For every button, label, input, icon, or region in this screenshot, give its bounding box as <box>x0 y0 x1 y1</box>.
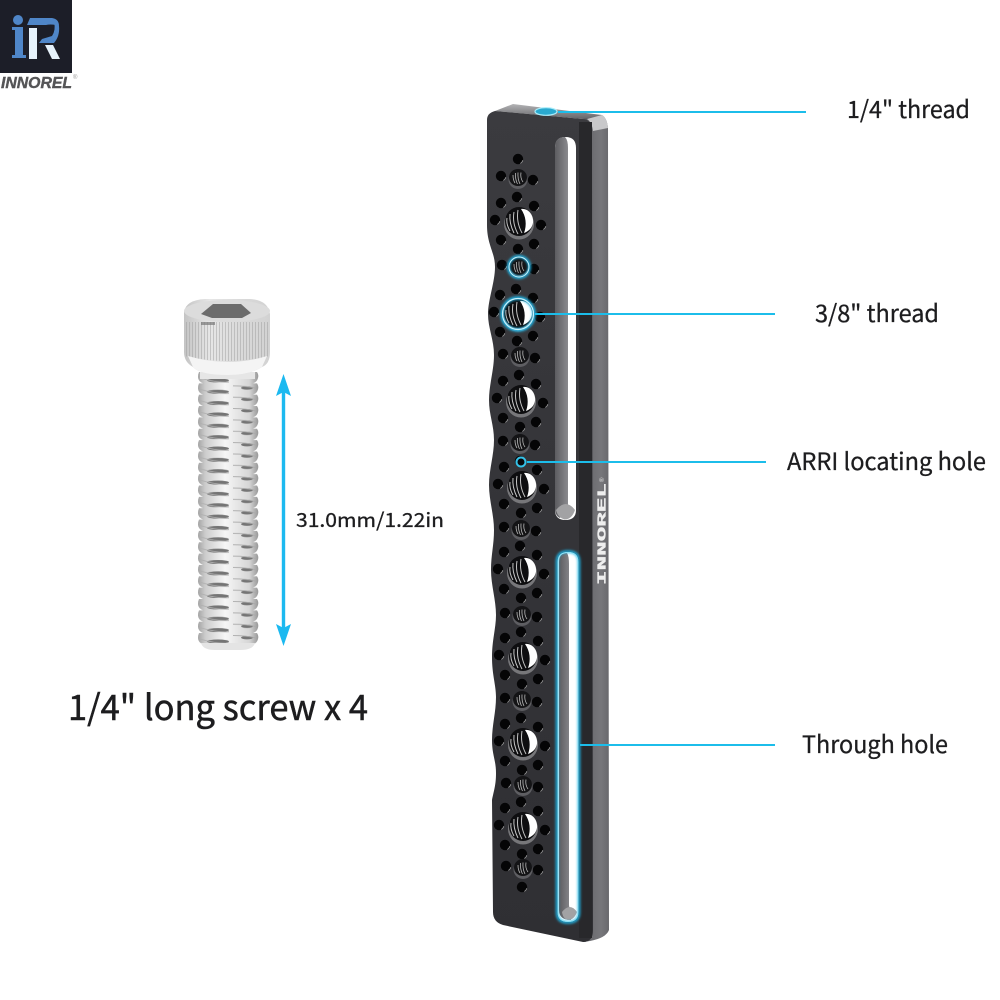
slot opening <box>558 552 578 922</box>
head bottom highlight <box>188 356 267 375</box>
logo wordmark: INNOREL <box>1 75 72 92</box>
label: ARRI locating hole <box>787 442 986 477</box>
glow around through slot <box>557 552 579 922</box>
leader line <box>580 744 775 746</box>
large thread hole 6 <box>494 627 550 689</box>
slot bottom curve <box>562 907 577 920</box>
registered mark: ® <box>73 74 78 81</box>
label: 3/8" thread <box>815 294 939 329</box>
screw head top face <box>184 300 270 322</box>
screw head <box>184 299 270 375</box>
callout: small hole ring <box>508 256 530 278</box>
screw caption: 1/4" long screw x 4 <box>68 680 368 731</box>
dimension arrow <box>276 374 291 646</box>
screw neck highlight <box>200 372 255 379</box>
slot opening <box>555 137 576 520</box>
leader line <box>535 313 775 315</box>
small hole group 5 <box>499 520 541 540</box>
through slot outline <box>558 552 578 922</box>
screw tip <box>201 643 255 650</box>
small hole group 6 <box>500 606 542 626</box>
callout: 3/8 thread <box>502 294 939 330</box>
screw <box>184 299 270 650</box>
leader line <box>558 111 806 113</box>
slot wall <box>559 553 571 920</box>
highlight ring <box>535 108 557 115</box>
dark strip beside slots <box>579 122 592 938</box>
callout: 1/4 thread <box>535 90 970 125</box>
highlight ring <box>502 298 534 330</box>
small hole group 8 <box>501 776 543 796</box>
large thread hole 2 <box>489 284 545 346</box>
large thread hole 4 <box>493 456 549 518</box>
large thread hole 3 <box>492 370 548 432</box>
plate registered mark: ® <box>599 477 606 482</box>
screw shaft with threads <box>197 372 259 644</box>
label: Through hole <box>802 725 948 760</box>
small hole group 3 <box>498 347 540 367</box>
head shoulder shadow <box>201 322 215 325</box>
slot bottom curve <box>556 504 575 520</box>
large thread hole 1 <box>490 192 546 254</box>
small hole group 7 <box>500 691 542 711</box>
small hole group 9 <box>501 859 543 879</box>
leader line <box>527 461 766 463</box>
hex socket <box>201 304 251 318</box>
logo mark: iR <box>12 15 60 59</box>
label: 1/4" thread <box>847 90 970 125</box>
head knurling <box>184 322 270 361</box>
large thread hole 8 <box>494 797 550 859</box>
upper slot <box>555 137 576 520</box>
side corner highlight <box>587 115 608 131</box>
slot wall <box>555 137 568 518</box>
highlight ring <box>516 458 526 466</box>
cheese plate <box>487 104 610 942</box>
dimension label: 31.0mm/1.22in <box>296 504 444 533</box>
small hole group 4 <box>498 434 540 454</box>
plate top face <box>495 104 602 121</box>
bottom hole <box>517 882 527 892</box>
plate side face <box>583 115 609 942</box>
plate brand text: INNOREL <box>596 483 610 585</box>
plate front face <box>487 111 593 942</box>
logo: INNOREL <box>0 0 78 92</box>
top hole <box>513 154 523 164</box>
callout: ARRI locating hole <box>516 442 986 477</box>
logo background <box>0 0 72 73</box>
lower through slot <box>557 552 579 922</box>
small hole group 1 <box>496 169 538 189</box>
large thread hole 7 <box>494 713 550 775</box>
small hole group 2 <box>497 258 539 278</box>
large thread hole 5 <box>493 541 549 603</box>
